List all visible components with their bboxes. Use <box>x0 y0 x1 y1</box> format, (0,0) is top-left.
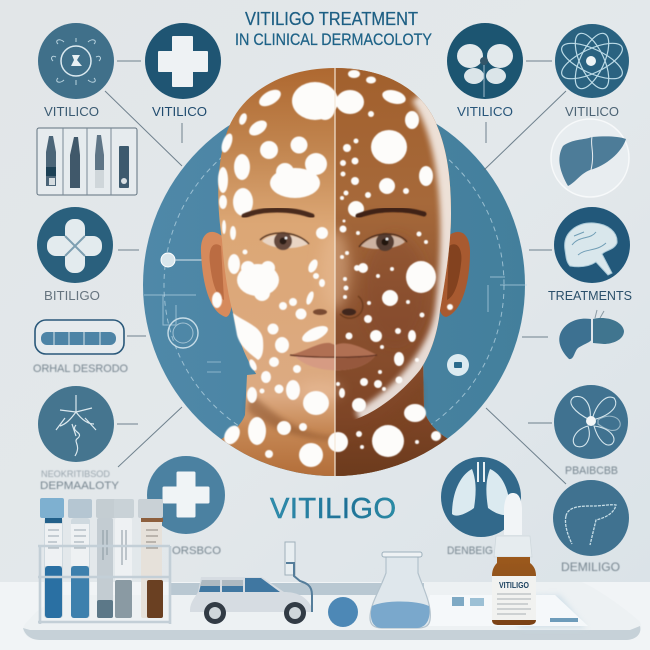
labels: DEPMAALOTY <box>40 480 120 492</box>
centre dividing line <box>334 68 336 476</box>
table surface <box>0 582 650 650</box>
label: VITILICO <box>44 104 99 119</box>
icon: bandage circle <box>37 207 113 283</box>
medicine bottle <box>492 493 536 625</box>
paperwork on tray <box>420 595 588 626</box>
icon: capsule strip <box>35 320 124 354</box>
neck and skull, light half <box>212 68 458 485</box>
icon: molecule circle <box>38 23 114 99</box>
title: VITILIGO TREATMENT <box>245 9 418 29</box>
white vitiligo patches <box>212 70 453 467</box>
icon: lungs circle <box>441 457 521 537</box>
label: ORSBCO <box>172 545 221 557</box>
test tube rack <box>38 498 170 624</box>
flask <box>370 552 430 628</box>
label: PBAIBCBB <box>565 465 618 477</box>
word mark: VITILIGO <box>270 493 396 525</box>
icon: medical cross dark <box>145 23 221 99</box>
neck and skull, dark half <box>335 68 451 476</box>
icon: blossom circle <box>554 385 628 459</box>
label: BITILIGO <box>44 288 100 303</box>
rack frame <box>38 546 170 624</box>
eyes <box>260 232 407 251</box>
blue tube two <box>68 499 92 618</box>
head illustration <box>201 68 470 485</box>
medicine bottle: VITILIGO <box>499 581 529 590</box>
grey tube three <box>96 499 116 618</box>
blue tube one <box>40 498 64 618</box>
nose <box>313 296 363 318</box>
icon: nerve circle <box>38 386 114 462</box>
icon: liver in ring <box>551 119 629 197</box>
brown tube five <box>138 499 163 618</box>
labels <box>40 469 120 492</box>
labels: NEOKRITIBSOD <box>41 469 111 479</box>
neck shadow <box>247 380 423 441</box>
title: IN CLINICAL DERMACOLOTY <box>235 30 432 49</box>
label: ORHAL DESRODO <box>33 363 128 375</box>
central blue disc <box>143 94 527 476</box>
label: DEMILIGO <box>561 560 620 574</box>
back strip behind tray <box>170 583 490 595</box>
icon: liver outline circle <box>553 480 629 556</box>
grey tube four <box>114 499 134 618</box>
label: DENBEIG <box>447 545 493 557</box>
eyebrows <box>244 210 424 216</box>
tray <box>23 582 641 640</box>
title <box>235 9 432 49</box>
icon: flower circle <box>447 23 523 99</box>
connector lines and arrows <box>105 61 566 484</box>
white rim highlights <box>360 95 450 420</box>
label: TREATMENTS <box>548 288 632 303</box>
lips <box>290 343 377 370</box>
icon: atom circle <box>555 24 629 98</box>
toy car <box>190 542 312 624</box>
icon: medical cross blue <box>147 456 225 534</box>
blue pill ball <box>328 597 358 627</box>
ears <box>201 232 470 317</box>
icon: brain circle <box>554 207 630 283</box>
panel: four vials <box>37 128 137 195</box>
label: VITILICO <box>565 104 619 119</box>
facial shading <box>306 227 415 400</box>
label: VITILICO <box>152 104 207 119</box>
icon: lung lobes <box>559 310 624 359</box>
label: VITILICO <box>457 104 513 119</box>
